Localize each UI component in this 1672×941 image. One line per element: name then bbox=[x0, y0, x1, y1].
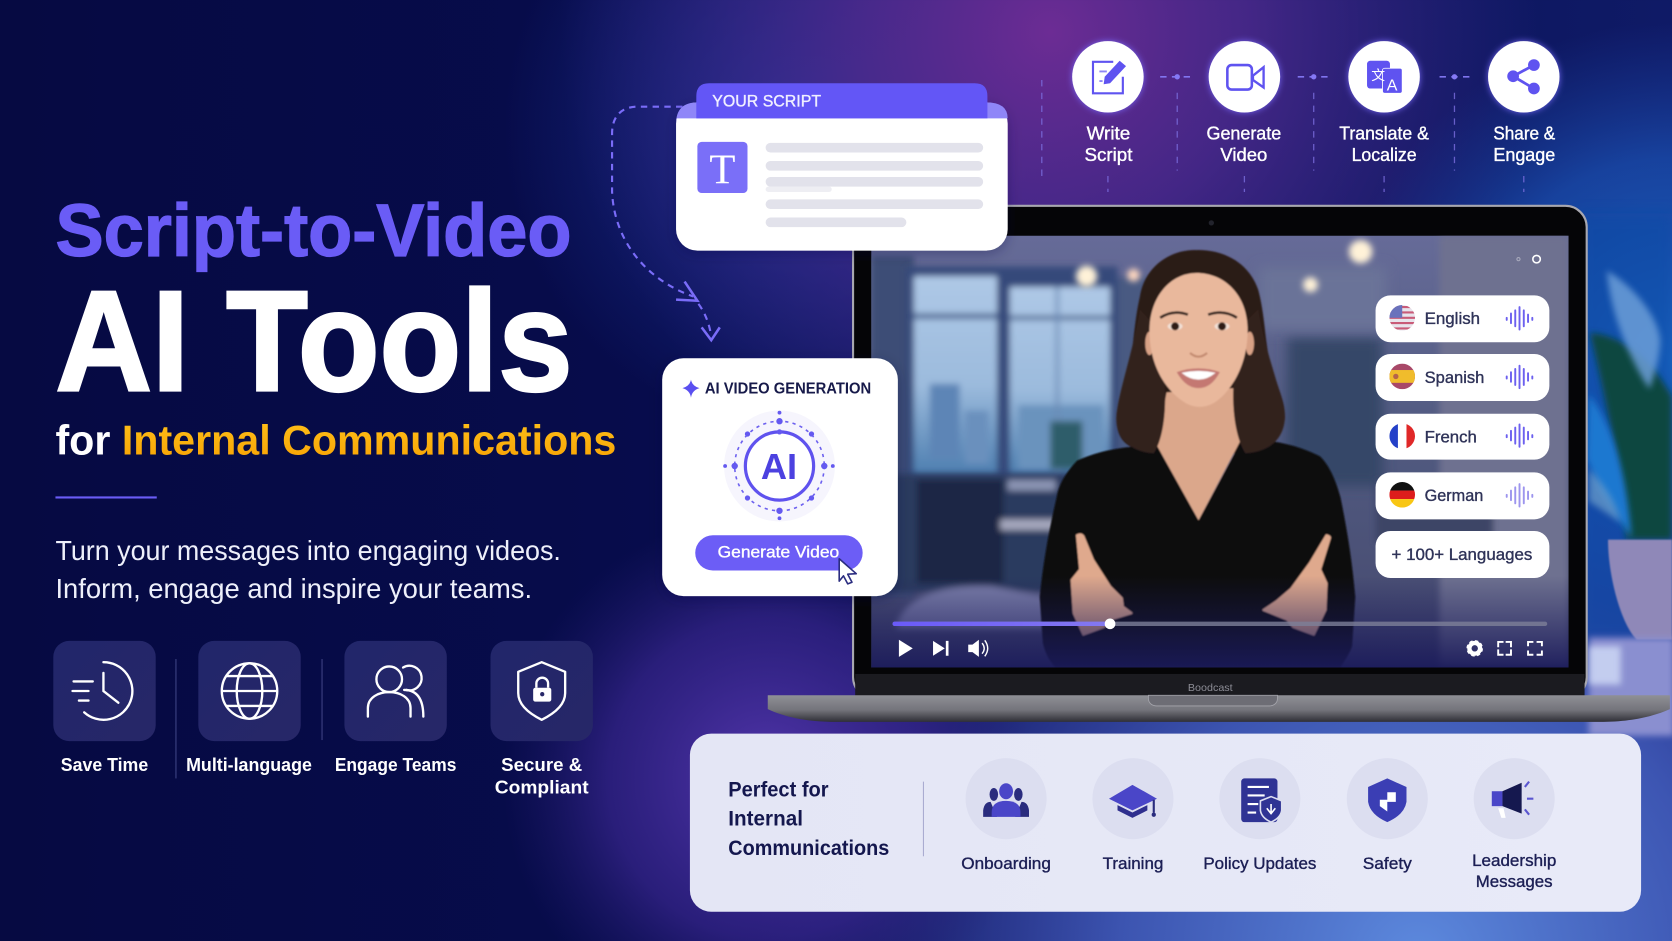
tile: Secure & Compliant bbox=[491, 641, 593, 797]
pill: German bbox=[1376, 472, 1549, 519]
AI emblem: AI bbox=[761, 446, 797, 487]
tile: Save Time bbox=[53, 641, 156, 775]
description text: Inform, engage and inspire your teams. bbox=[55, 573, 532, 604]
panel heading bbox=[728, 778, 889, 860]
tile: Multi-language: Multi-language bbox=[186, 754, 312, 775]
benefit tiles bbox=[53, 641, 593, 797]
generate button: Generate Video bbox=[718, 543, 839, 562]
hair back bbox=[1116, 250, 1285, 453]
use case: Policy Updates bbox=[1203, 758, 1316, 873]
use case: Leadership Messages bbox=[1472, 758, 1556, 891]
brand text: Boodcast bbox=[1188, 683, 1233, 694]
use case: Leadership Messages: Leadership bbox=[1472, 851, 1556, 870]
blurred office furniture bbox=[871, 475, 1493, 629]
card tab heading bbox=[696, 83, 987, 118]
use-case panel bbox=[690, 734, 1641, 912]
icon: T text: T bbox=[709, 146, 735, 193]
step: Write Script: Write bbox=[1087, 124, 1130, 144]
eyes bbox=[1168, 322, 1229, 330]
video controls right bbox=[1468, 641, 1542, 655]
tile: Save Time: Save Time bbox=[61, 754, 148, 775]
ears bbox=[1145, 332, 1154, 355]
tile: Secure & Compliant: Secure & bbox=[501, 754, 582, 775]
pill: French bbox=[1376, 414, 1549, 460]
blurred windows bbox=[906, 267, 1118, 480]
laptop screen: video scene bbox=[871, 236, 1569, 668]
use case: Onboarding bbox=[961, 758, 1051, 873]
title: AI Tools: AI Tools bbox=[55, 262, 573, 421]
step: Share & Engage: Engage bbox=[1493, 145, 1555, 165]
panel heading: Perfect for bbox=[728, 778, 829, 802]
use case: Safety bbox=[1347, 758, 1428, 873]
pill: English bbox=[1376, 295, 1549, 342]
presenter bbox=[1040, 250, 1355, 668]
card tab heading: YOUR SCRIPT bbox=[712, 92, 821, 111]
description text: Turn your messages into engaging videos. bbox=[55, 535, 561, 566]
tile: Engage Teams bbox=[335, 641, 456, 775]
subtitle: for Internal Communications: for Internal Communications bbox=[55, 416, 616, 463]
step: Generate Video: Generate bbox=[1207, 124, 1281, 144]
pill: English: English bbox=[1425, 309, 1480, 328]
mouth bbox=[1177, 368, 1220, 388]
generate button bbox=[695, 535, 863, 571]
step: Generate Video bbox=[1207, 41, 1281, 165]
card body bbox=[676, 102, 1008, 251]
script card bbox=[676, 83, 1008, 251]
step: Translate & Localize: Translate & bbox=[1339, 124, 1429, 144]
pill: Spanish: Spanish bbox=[1425, 368, 1484, 387]
use case: Safety: Safety bbox=[1363, 854, 1412, 873]
process steps bbox=[1042, 41, 1560, 192]
step: Share & Engage bbox=[1488, 41, 1560, 165]
dashed arrow from script to AI card bbox=[612, 107, 720, 340]
laptop base bbox=[768, 695, 1670, 722]
step: Translate & Localize: A bbox=[1387, 78, 1398, 95]
tile: Multi-language bbox=[186, 641, 312, 775]
tile: Secure & Compliant: Compliant bbox=[495, 776, 589, 797]
hair locks bbox=[1116, 340, 1166, 454]
video top-right glyph bbox=[1517, 255, 1540, 263]
description text bbox=[55, 535, 561, 604]
step: Write Script bbox=[1072, 41, 1144, 165]
card heading: AI VIDEO GENERATION bbox=[705, 380, 871, 397]
step: Translate & Localize: Localize bbox=[1352, 145, 1417, 165]
progress bar bbox=[893, 618, 1547, 629]
use case: Training bbox=[1092, 758, 1173, 873]
title block bbox=[55, 188, 616, 463]
step: Generate Video: Video bbox=[1220, 145, 1267, 165]
pill: French: French bbox=[1425, 428, 1477, 447]
brows bbox=[1160, 313, 1237, 318]
nose bbox=[1190, 353, 1207, 357]
pill: German: German bbox=[1425, 486, 1483, 505]
step: Write Script: Script bbox=[1084, 145, 1132, 165]
camera bbox=[1209, 220, 1214, 226]
video controls left bbox=[899, 640, 988, 657]
use case: Onboarding: Onboarding bbox=[961, 854, 1051, 873]
title: Script-to-Video: Script-to-Video bbox=[55, 188, 572, 272]
hand right bbox=[1264, 535, 1330, 634]
panel heading: Internal bbox=[728, 806, 803, 830]
blouse bbox=[1040, 439, 1355, 668]
icon: T text bbox=[697, 142, 747, 193]
neck and chest bbox=[1157, 388, 1242, 520]
use case: Policy Updates: Policy Updates bbox=[1203, 854, 1316, 873]
cursor bbox=[839, 559, 856, 584]
step: Translate & Localize: 文 bbox=[1371, 67, 1385, 83]
step: Translate & Localize bbox=[1339, 41, 1429, 165]
language pills bbox=[1376, 295, 1549, 578]
panel heading: Communications bbox=[728, 836, 889, 860]
laptop bbox=[768, 206, 1670, 722]
accent rule bbox=[55, 496, 157, 499]
use case: Training: Training bbox=[1103, 854, 1163, 873]
pill: Spanish bbox=[1376, 354, 1549, 401]
face bbox=[1150, 273, 1248, 407]
AI emblem bbox=[723, 411, 835, 521]
video control gradient bbox=[871, 576, 1569, 668]
step: Share & Engage: Share & bbox=[1493, 124, 1555, 144]
sparkle icon bbox=[682, 380, 700, 398]
laptop lid bbox=[853, 206, 1587, 698]
hand left bbox=[1072, 534, 1131, 634]
script text lines bbox=[766, 143, 983, 227]
pill: 100+ languages: + 100+ Languages bbox=[1392, 545, 1532, 564]
pill: 100+ languages bbox=[1376, 531, 1549, 578]
trackpad notch bbox=[1148, 695, 1277, 706]
AI generation card bbox=[662, 358, 898, 596]
tile: Engage Teams: Engage Teams bbox=[335, 754, 456, 775]
use case: Leadership Messages: Messages bbox=[1476, 872, 1553, 891]
decor: right side plant and floor bbox=[1578, 213, 1672, 736]
